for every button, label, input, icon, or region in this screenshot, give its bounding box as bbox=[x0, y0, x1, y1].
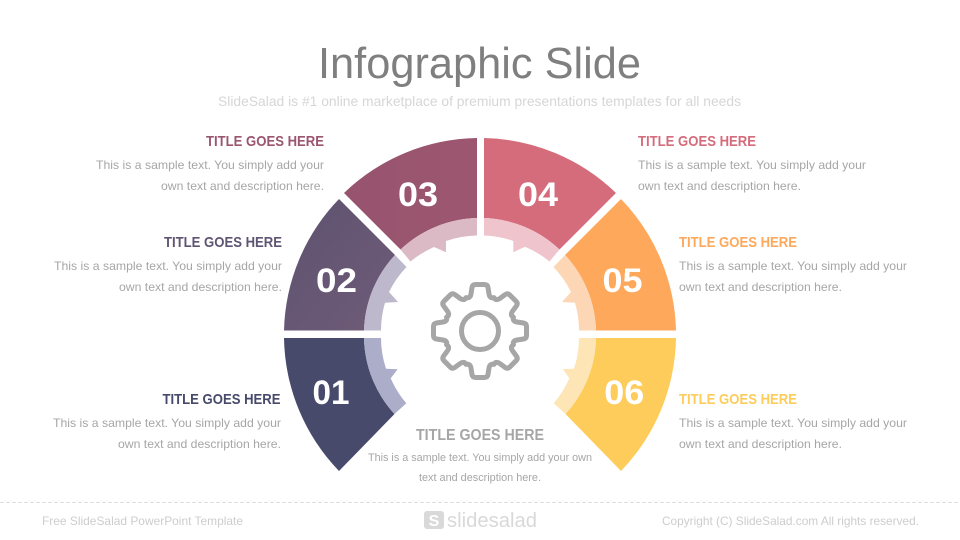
segment 05: 05 bbox=[602, 262, 642, 300]
segment 05 bbox=[554, 199, 676, 330]
text block 03: This is a sample text. You simply add your bbox=[96, 158, 324, 172]
text block 04: own text and description here. bbox=[638, 179, 801, 193]
segment 01 bbox=[284, 338, 406, 471]
segment 02: 02 bbox=[316, 262, 357, 300]
segment 03: 03 bbox=[398, 176, 438, 214]
text block 03: own text and description here. bbox=[161, 179, 324, 193]
segment 02 bbox=[284, 199, 406, 330]
footer logo: slidesalad bbox=[447, 510, 537, 532]
text block 06: TITLE GOES HERE bbox=[679, 391, 797, 408]
text block 05: This is a sample text. You simply add your bbox=[679, 259, 907, 273]
text block 03 bbox=[96, 133, 324, 193]
text block center: text and description here. bbox=[419, 472, 541, 484]
text block 05: TITLE GOES HERE bbox=[679, 234, 797, 251]
text block 05 bbox=[679, 234, 907, 294]
footer logo: S bbox=[429, 513, 440, 530]
text block 02: TITLE GOES HERE bbox=[164, 234, 282, 251]
text block 05: own text and description here. bbox=[679, 280, 842, 294]
text block 01 bbox=[53, 391, 281, 451]
segment 03 bbox=[344, 138, 477, 262]
segment 04: 04 bbox=[518, 176, 558, 214]
text block 02: This is a sample text. You simply add your bbox=[54, 259, 282, 273]
text block 03: TITLE GOES HERE bbox=[206, 133, 324, 150]
text block 02 bbox=[54, 234, 282, 294]
text block 02: own text and description here. bbox=[119, 280, 282, 294]
text block 06: own text and description here. bbox=[679, 437, 842, 451]
text block 04: TITLE GOES HERE bbox=[638, 133, 756, 150]
text block 04 bbox=[638, 133, 866, 193]
segment 01: 01 bbox=[312, 374, 350, 412]
text block 04: This is a sample text. You simply add your bbox=[638, 158, 866, 172]
icon: gear bbox=[434, 284, 526, 378]
subtitle: SlideSalad is #1 online marketplace of premium presentations templates for all needs bbox=[218, 93, 741, 109]
segment 04 bbox=[484, 138, 616, 262]
segment 06 bbox=[554, 338, 676, 471]
text block 06: This is a sample text. You simply add your bbox=[679, 416, 907, 430]
text block 01: own text and description here. bbox=[118, 437, 281, 451]
text block center: TITLE GOES HERE bbox=[416, 427, 544, 444]
title: Infographic Slide bbox=[318, 39, 641, 88]
text block center bbox=[368, 427, 592, 484]
text block 01: This is a sample text. You simply add your bbox=[53, 416, 281, 430]
text block center: This is a sample text. You simply add your own bbox=[368, 452, 592, 464]
text block 01: TITLE GOES HERE bbox=[162, 391, 280, 408]
footer right text: Copyright (C) SlideSalad.com All rights reserved. bbox=[662, 514, 919, 528]
footer left text: Free SlideSalad PowerPoint Template bbox=[42, 514, 243, 528]
text block 06 bbox=[679, 391, 907, 451]
segment 06: 06 bbox=[604, 374, 644, 412]
